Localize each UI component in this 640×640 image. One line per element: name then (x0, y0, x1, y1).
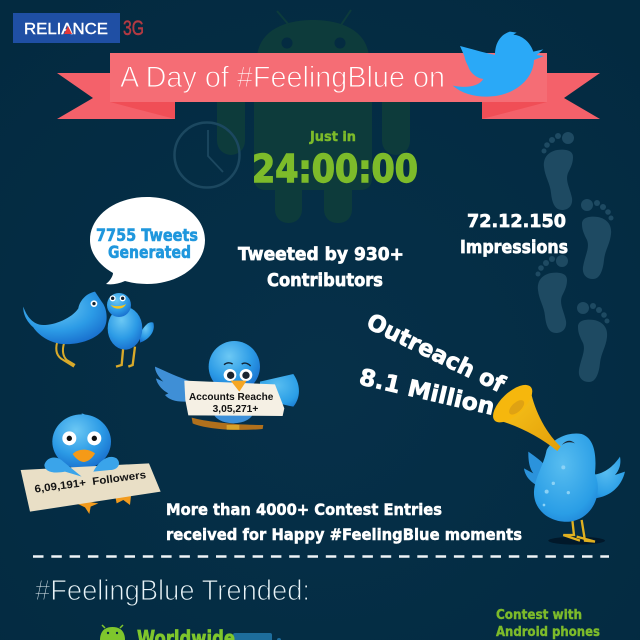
impressions: 72.12.150 (467, 211, 566, 232)
ribbon banner (57, 53, 600, 119)
android watermark (217, 10, 410, 223)
megaphone horn (487, 379, 561, 451)
contest with android phones: Android phones (496, 625, 600, 640)
footprint 1 (542, 132, 574, 210)
contest with android phones: Contest with (496, 608, 582, 623)
bird with sign: accounts reached (155, 341, 299, 430)
footprints watermark (536, 132, 614, 382)
outreach text: Outreach of (362, 309, 509, 399)
logo: Reliance 3G: 3G (123, 17, 144, 40)
footprint 4 (577, 302, 610, 382)
android icon (100, 625, 125, 640)
speech bubble: Generated (108, 243, 191, 263)
megaphone bird (487, 379, 625, 545)
bird with sign: followers (21, 413, 161, 514)
speech bubble (90, 197, 205, 284)
footprint 2 (581, 199, 614, 279)
clock watermark (174, 122, 240, 188)
section heading: trended: #FeelingBlue Trended: (35, 575, 310, 607)
logo: Reliance 3G (13, 13, 144, 43)
tweeted by contributors (238, 244, 404, 291)
contest entries text: received for Happy #FeelingBlue moments (166, 525, 522, 544)
just in label: Just in (309, 130, 356, 145)
logo: Reliance 3G: RELIANCE (24, 21, 108, 38)
bird with sign: accounts reached: Accounts Reache (189, 392, 274, 403)
icon: twitter bird (453, 32, 544, 97)
speech bubble: 7755 Tweets (96, 226, 198, 246)
tweeted by contributors: Contributors (267, 270, 383, 291)
bird with sign: followers: 6,09,191+ Followers (34, 469, 147, 496)
contest entries text: More than 4000+ Contest Entries (166, 500, 442, 519)
timer: 24:00:00 (252, 147, 418, 191)
contest entries text (166, 500, 522, 544)
outreach text: 8.1 Million (357, 365, 497, 421)
impressions (460, 211, 568, 258)
contest with android phones (496, 608, 600, 640)
impressions: Impressions (460, 237, 568, 258)
bird with sign: accounts reached: 3,05,271+ (213, 404, 259, 415)
tweeted by contributors: Tweeted by 930+ (238, 244, 404, 265)
footprint 3 (536, 255, 568, 333)
banner title: A Day of #FeelingBlue on (120, 61, 445, 94)
two whispering birds (23, 292, 154, 367)
